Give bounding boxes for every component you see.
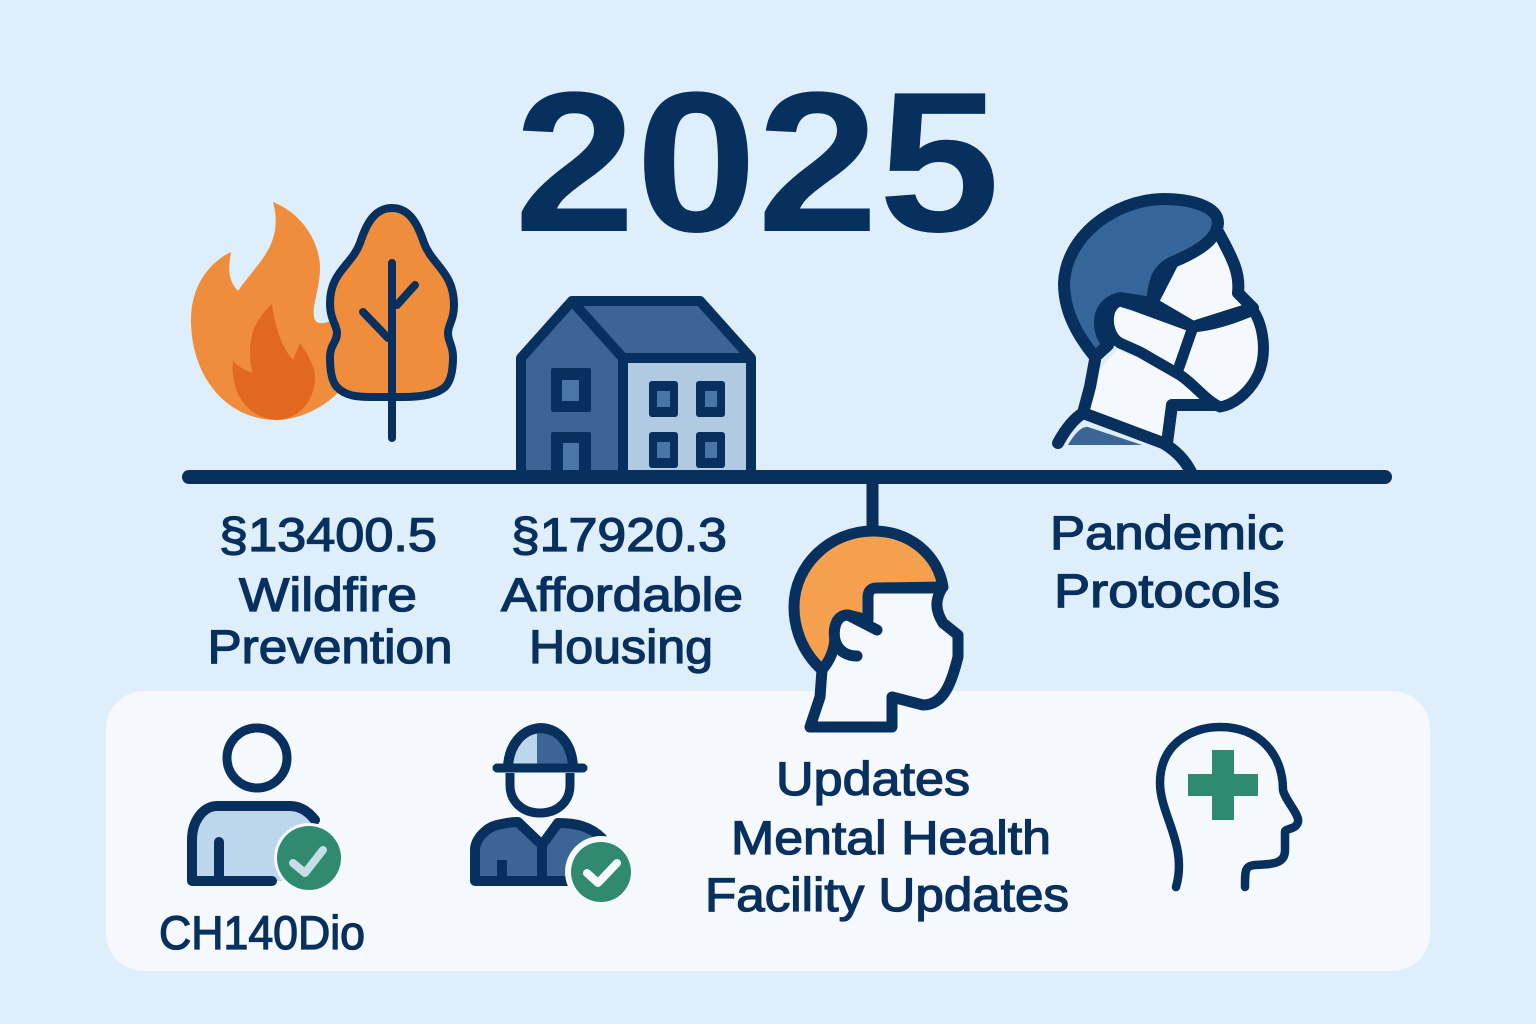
icon: head with mask xyxy=(1058,199,1263,472)
icon: head with medical cross xyxy=(1160,727,1298,887)
label: wildfire prevention: Prevention xyxy=(208,620,452,673)
label: pandemic protocols xyxy=(1050,506,1284,617)
label: pandemic protocols: Protocols xyxy=(1054,564,1280,617)
label: pandemic protocols: Pandemic xyxy=(1050,506,1284,559)
label: affordable housing: Housing xyxy=(529,620,713,673)
title: 2025: 2025 xyxy=(514,51,1000,274)
label: mental health facility updates xyxy=(705,752,1069,921)
icon: head with orange cap xyxy=(794,531,958,727)
icon: person with check xyxy=(192,728,344,893)
label: affordable housing: §17920.3 xyxy=(511,508,727,561)
icon: flame and tree xyxy=(191,202,454,438)
label: affordable housing: Affordable xyxy=(501,568,743,621)
icon: worker with check xyxy=(475,728,637,908)
label: garbled caption: CH140Dio xyxy=(159,906,365,959)
label: wildfire prevention: Wildfire xyxy=(239,568,417,621)
timeline axis xyxy=(189,477,1385,530)
label: affordable housing xyxy=(501,508,743,673)
bottom panel xyxy=(106,691,1430,971)
icon: house xyxy=(521,301,751,474)
label: mental health facility updates: Updates xyxy=(776,752,970,805)
label: wildfire prevention: §13400.5 xyxy=(219,508,437,561)
label: wildfire prevention xyxy=(208,508,452,673)
label: mental health facility updates: Mental Health xyxy=(731,811,1051,864)
label: mental health facility updates: Facility Updates xyxy=(705,868,1069,921)
